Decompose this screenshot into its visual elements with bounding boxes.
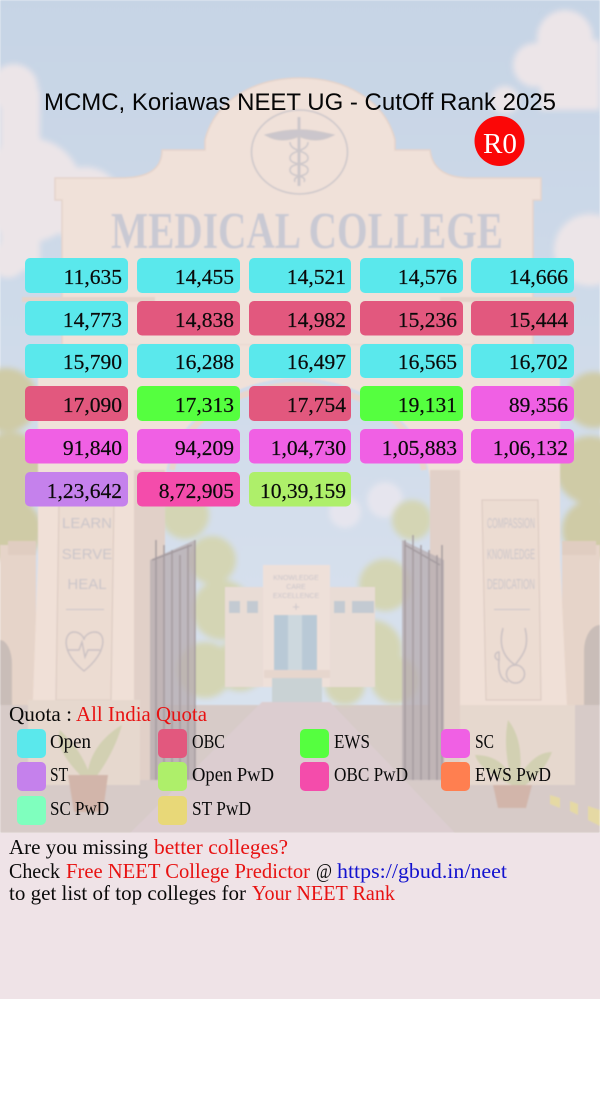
gate upper structure: [55, 78, 541, 345]
background illustration: medical college gate: KNOWLEDGE: [487, 546, 535, 563]
row 6: 10,39,159: [260, 479, 346, 503]
promo text block: @: [316, 859, 332, 883]
quota heading: [9, 702, 208, 726]
left pillar motto: [62, 515, 112, 610]
row 5: 1,04,730: [271, 436, 346, 460]
row 4: 89,356: [509, 393, 568, 417]
arch ribs: [172, 385, 424, 470]
legend: Open PwD: Open PwD: [192, 764, 274, 786]
legend: OBC PwD: OBC PwD: [334, 764, 408, 786]
legend: OBC: [158, 729, 225, 758]
legend: SC: SC: [475, 731, 494, 753]
right iron gate: [402, 535, 444, 780]
legend: Open PwD: [158, 762, 274, 791]
row 5: 1,05,883: [382, 436, 457, 460]
sky: [0, 0, 600, 720]
legend: Open: Open: [50, 731, 91, 753]
row 5: 1,06,132: [493, 436, 568, 460]
clouds: [0, 10, 600, 286]
bottom promo band: [0, 833, 600, 999]
right pillar motto: [487, 515, 535, 610]
row 2: 15,236: [398, 308, 457, 332]
row 3: 16,702: [509, 350, 568, 374]
left pillar motto: SERVE: [62, 546, 112, 563]
promo text block: Are you missing: [9, 835, 149, 859]
icon: heart: [66, 632, 103, 671]
distant clouds in the opening: [329, 482, 403, 528]
row 3: 15,790: [63, 350, 122, 374]
icon: stethoscope: [495, 628, 527, 683]
distant building: CARE: [286, 584, 306, 591]
legend: EWS: [300, 729, 370, 758]
icon: right potted plant: [475, 720, 552, 808]
row 1: 14,455: [175, 265, 234, 289]
legend: ST PwD: ST PwD: [192, 798, 251, 820]
legend: [17, 729, 551, 825]
distant trees left: [161, 491, 266, 698]
legend: EWS PwD: [441, 762, 551, 791]
distant trees right: [325, 500, 432, 705]
row 4: 19,131: [398, 393, 457, 417]
legend: Open: [17, 729, 91, 758]
round badge R0: [474, 116, 524, 166]
legend: ST: ST: [50, 764, 68, 786]
row 3: 16,497: [287, 350, 346, 374]
right pillar motto: DEDICATION: [487, 576, 535, 593]
left pillar motto: LEARN: [62, 515, 112, 532]
side lintels: [22, 297, 576, 302]
row 1: [25, 258, 574, 293]
ground and road: [0, 705, 600, 833]
background illustration: medical college gate: [0, 0, 600, 833]
quota heading: Quota :: [9, 702, 72, 726]
distant building: +: [292, 599, 300, 614]
icon: left potted plant: [59, 725, 122, 812]
row 4: 17,090: [63, 393, 122, 417]
left iron gate: [150, 540, 195, 780]
legend: SC PwD: [17, 796, 109, 825]
legend: OBC: OBC: [192, 731, 225, 753]
legend: EWS PwD: EWS PwD: [475, 764, 551, 786]
background illustration: medical college gate: COMPASSION: [487, 515, 535, 532]
row 5: 91,840: [63, 436, 122, 460]
cutoff rank tile grid: [25, 258, 574, 506]
legend: SC: [441, 729, 494, 758]
row 3: 16,288: [175, 350, 234, 374]
row 1: 14,666: [509, 265, 568, 289]
row 6: 1,23,642: [47, 479, 122, 503]
distant building: [225, 565, 375, 702]
row 6: 8,72,905: [159, 479, 234, 503]
wall arches: [0, 625, 600, 724]
road curb: [550, 795, 600, 826]
arch spandrel around the opening: [38, 345, 560, 480]
right pillar: [430, 470, 575, 785]
row 2: 14,982: [287, 308, 346, 332]
quota heading: All India Quota: [76, 702, 208, 726]
distant building: KNOWLEDGE: [273, 575, 319, 582]
row 1: 14,521: [287, 265, 346, 289]
row 3: [25, 344, 574, 378]
row 4: 17,754: [287, 393, 346, 417]
row 5: 94,209: [175, 436, 234, 460]
title: MCMC, Koriawas NEET UG - CutOff Rank 2025: [44, 89, 556, 116]
row 2: 14,773: [63, 308, 122, 332]
legend: ST PwD: [158, 796, 251, 825]
row 2: [25, 301, 574, 336]
legend: OBC PwD: [300, 762, 408, 791]
row 2: 15,444: [509, 308, 568, 332]
road: [130, 702, 455, 833]
promo text block: to get list of top colleges for: [9, 881, 246, 905]
left pillar motto: HEAL: [67, 576, 107, 593]
side walls: [0, 541, 600, 795]
left pillar: [28, 470, 165, 785]
promo text block: Free NEET College Predictor: [66, 859, 310, 883]
side trees: [0, 368, 600, 562]
promo text block: Check: [9, 859, 60, 883]
legend: SC PwD: SC PwD: [50, 798, 109, 820]
promo text block: [9, 835, 507, 905]
row 4: 17,313: [175, 393, 234, 417]
legend: EWS: EWS: [334, 731, 370, 753]
promo text block: Your NEET Rank: [252, 881, 395, 905]
row 1: 11,635: [64, 265, 122, 289]
row 6: [25, 472, 351, 506]
promo text block: better colleges?: [154, 835, 288, 859]
promo text block: https://gbud.in/neet: [337, 859, 507, 883]
medallion with caduceus: [252, 110, 348, 194]
distant building: EXCELLENCE: [273, 593, 319, 600]
row 4: [25, 386, 574, 421]
legend: ST: [17, 762, 68, 791]
row 5: [25, 429, 574, 464]
round badge R0: R0: [483, 128, 517, 160]
row 1: 14,576: [398, 265, 457, 289]
row 3: 16,565: [398, 350, 457, 374]
row 2: 14,838: [175, 308, 234, 332]
